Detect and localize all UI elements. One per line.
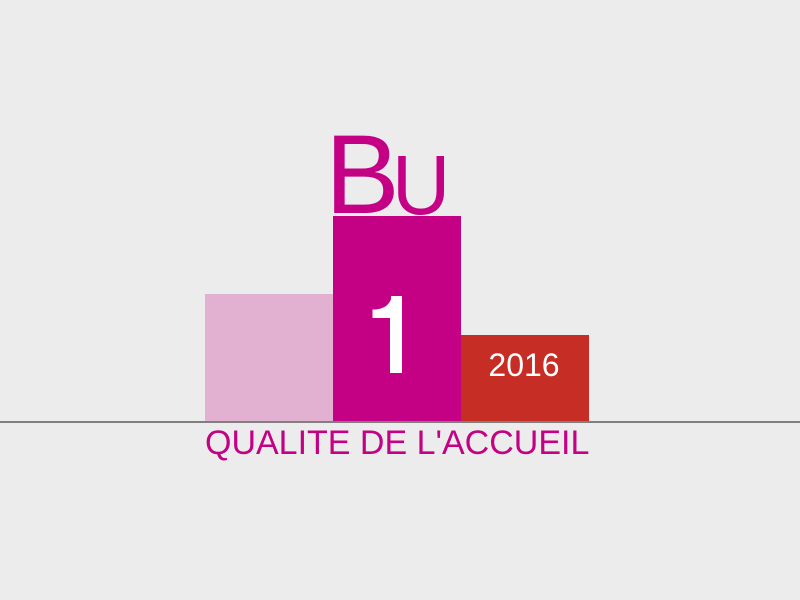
heading: Bu: B: [325, 112, 400, 237]
year label: 2016: [488, 347, 560, 383]
rank number: [372, 296, 402, 373]
heading: Bu: U: [392, 138, 450, 232]
heading: Bu: [325, 112, 450, 237]
baseline: [0, 421, 800, 423]
bar: magenta rank: [333, 216, 461, 422]
bar: pale pink: [205, 294, 333, 422]
caption: qualite de l'accueil: QUALITE DE L'ACCUEIL: [205, 424, 589, 462]
bar: red year: [461, 335, 589, 422]
chart: podium: [0, 216, 800, 423]
rank number: 1: [364, 271, 426, 396]
